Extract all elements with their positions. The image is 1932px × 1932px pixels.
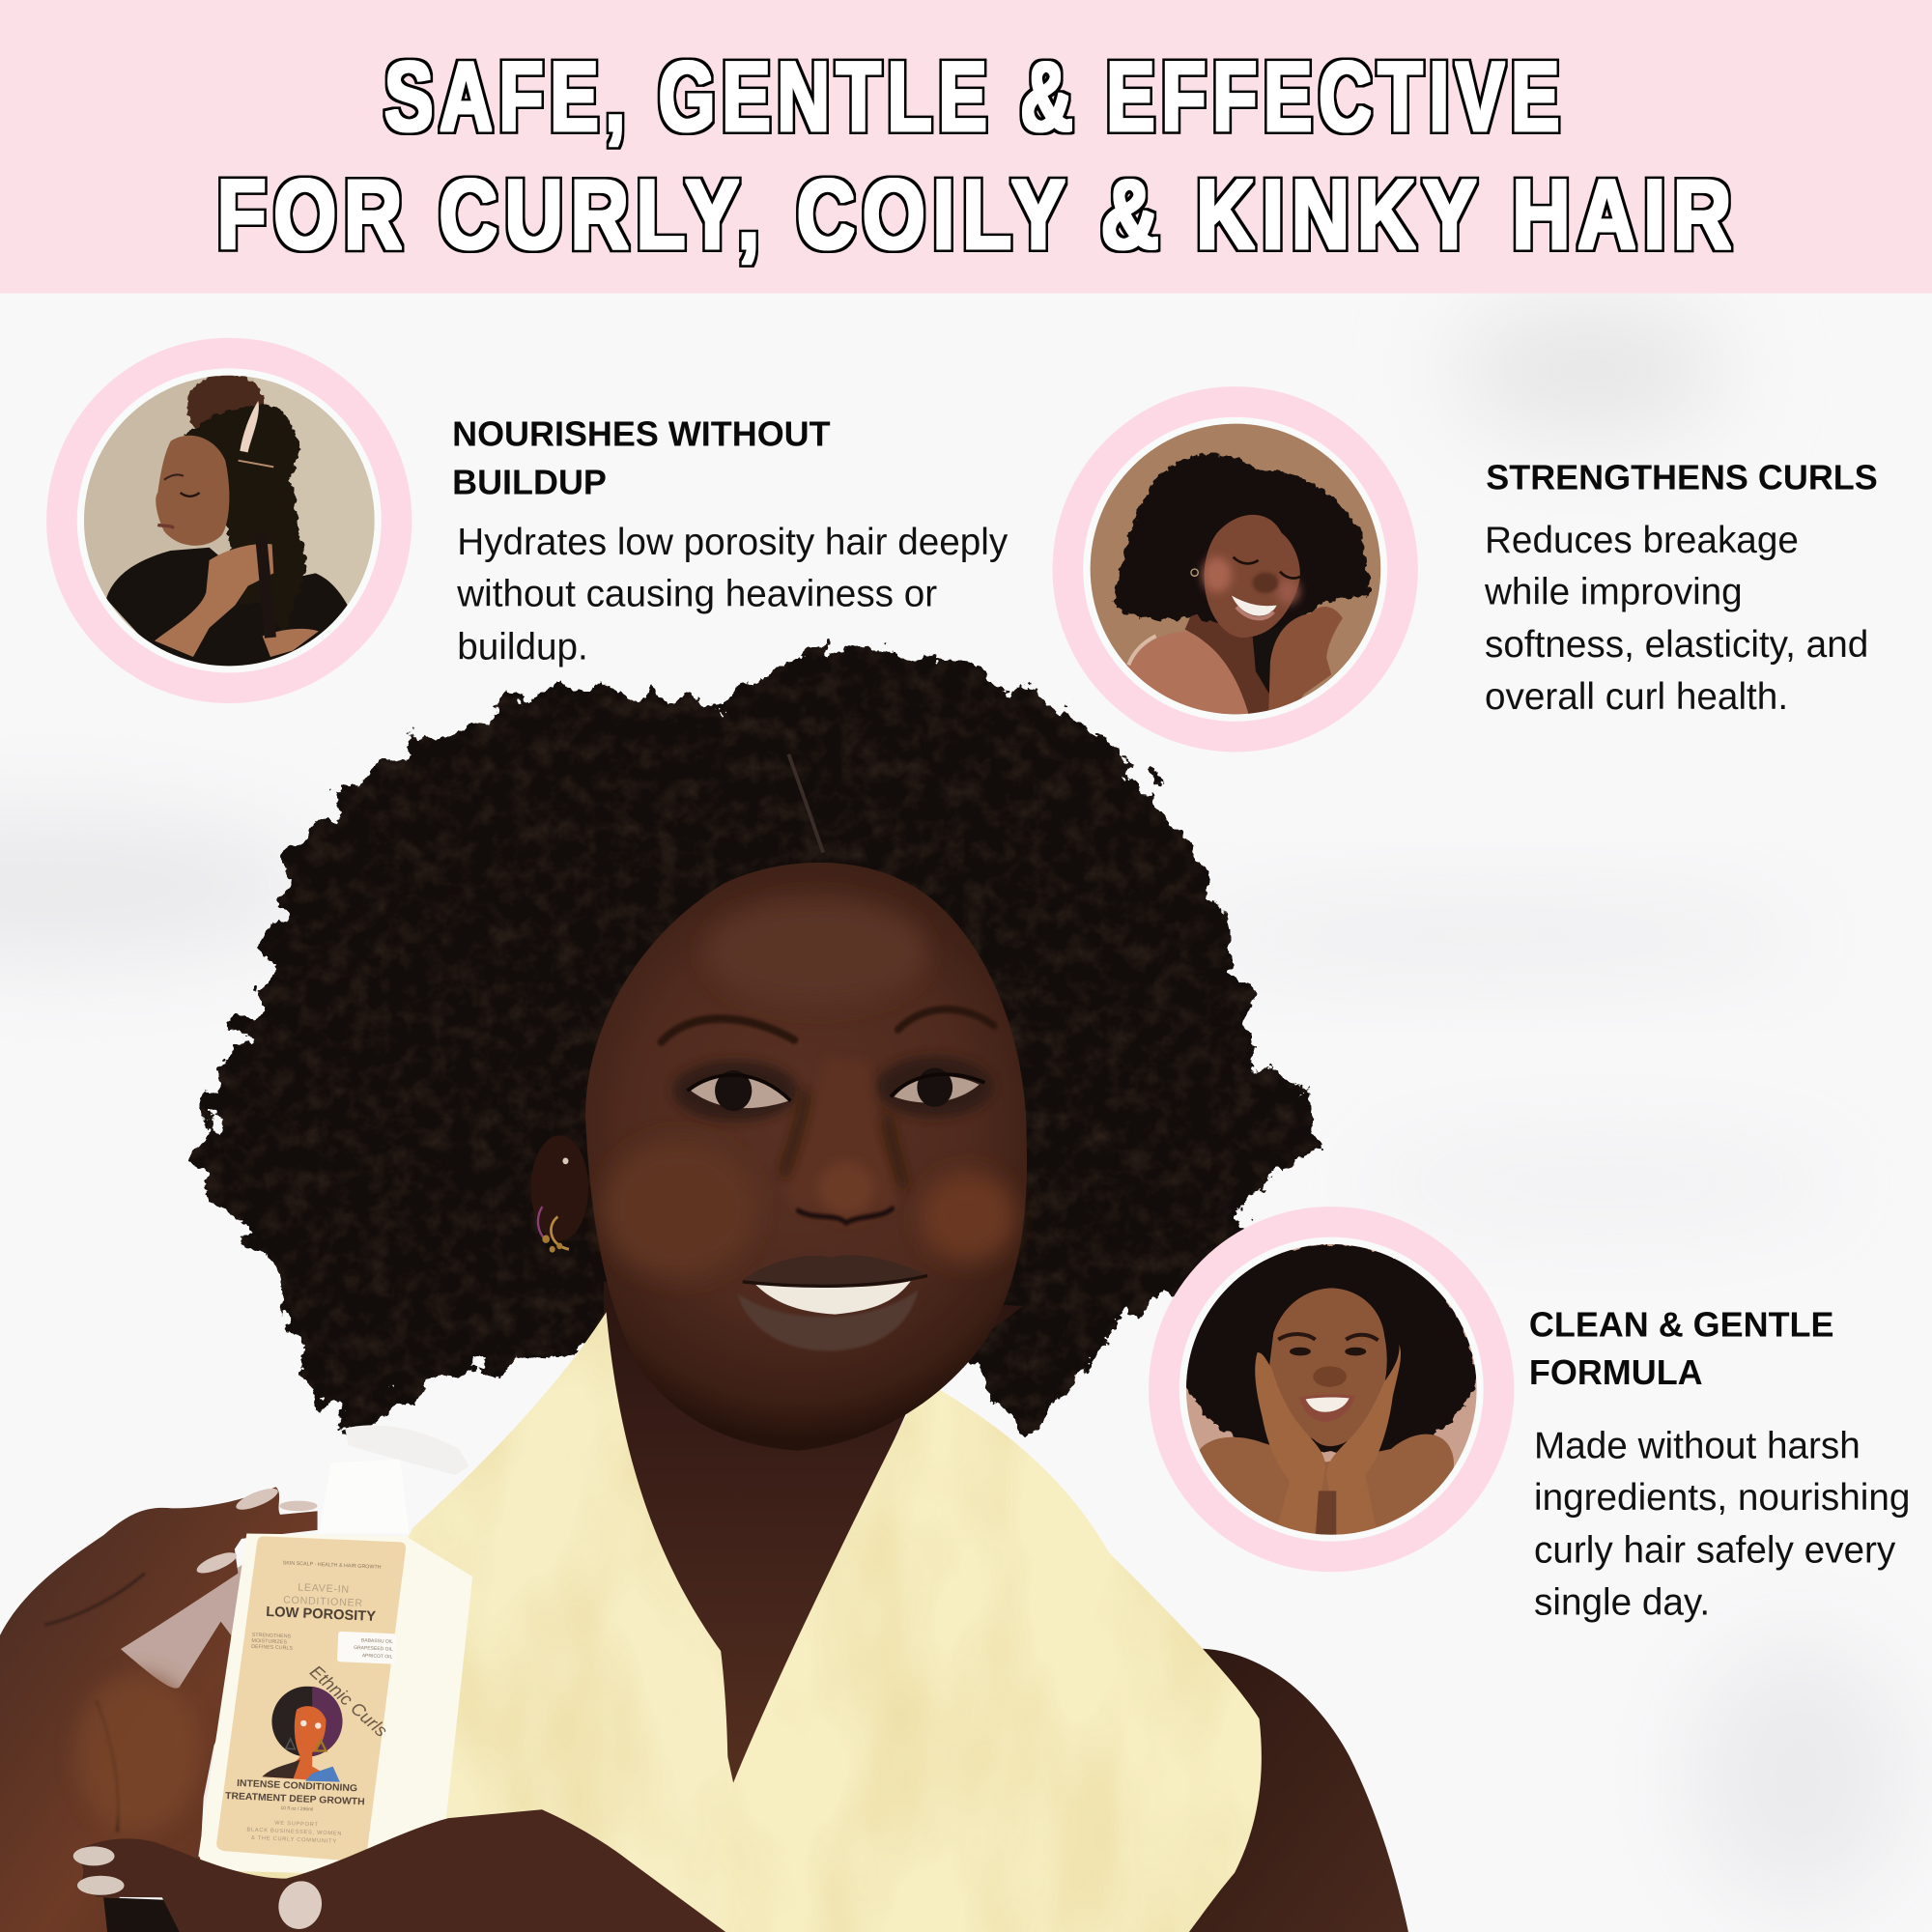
- hair: [1184, 1244, 1475, 1452]
- hair: [1113, 454, 1369, 636]
- raised hand: [155, 544, 273, 657]
- scarf: [185, 1312, 1262, 1932]
- photo circle: nourishes: [46, 338, 412, 703]
- face: [1268, 1288, 1387, 1446]
- heading and text: strengthens curls: Reduces breakage: [1485, 520, 1799, 561]
- heading and text: strengthens curls: while improving: [1484, 572, 1743, 613]
- photo circle: strengthens: [1053, 386, 1418, 752]
- hair strand: [261, 534, 270, 638]
- label script logo: Ethnic Curls: [306, 1662, 391, 1741]
- bottle label: INTENSE CONDITIONING: [237, 1778, 357, 1794]
- left eye: [691, 1076, 789, 1108]
- bottle label: BLACK BUSINESSES, WOMEN: [246, 1827, 342, 1837]
- nose: [786, 1058, 899, 1221]
- photo circle: clean and gentle: [1149, 1207, 1514, 1572]
- heading and text: strengthens curls: softness, elasticity, and: [1485, 624, 1868, 666]
- earrings: [538, 1207, 549, 1241]
- hair back: [191, 647, 1314, 1435]
- bottle body: [198, 1534, 472, 1874]
- black tee: [106, 548, 350, 676]
- bottle label: BABASSU OIL: [361, 1637, 393, 1645]
- bottle label: SKIN SCALP · HEALTH & HAIR GROWTH: [283, 1560, 382, 1571]
- right eye: [895, 1076, 980, 1102]
- heading and text: clean and gentle formula: FORMULA: [1529, 1352, 1703, 1392]
- bottle label: 10 fl oz / 296ml: [280, 1805, 313, 1813]
- eye shadows: [672, 1061, 798, 1122]
- title: SAFE, GENTLE & EFFECTIVE: [384, 42, 1566, 152]
- heading and text: nourishes without buildup: [452, 414, 1009, 668]
- nose: [1313, 1366, 1347, 1387]
- bottle label: DEFINES CURLS: [251, 1644, 293, 1652]
- shoulders: [1198, 1435, 1454, 1539]
- heading and text: nourishes without buildup: BUILDUP: [452, 462, 607, 501]
- neck: [1185, 607, 1275, 717]
- bottle label: CONDITIONER: [283, 1594, 363, 1609]
- right shoulder: [1182, 1649, 1408, 1932]
- eyebrows: [662, 1019, 794, 1042]
- heading and text: strengthens curls: STRENGTHENS CURLS: [1486, 457, 1878, 497]
- eyes: [1290, 1348, 1311, 1355]
- bottle label: & THE CURLY COMMUNITY: [251, 1835, 337, 1845]
- title: [216, 42, 1739, 270]
- dark gap under hands: [103, 1897, 204, 1932]
- hair front: parting: [788, 754, 823, 853]
- bottle label: [216, 1536, 406, 1861]
- hair clip: [240, 401, 259, 452]
- parting: [239, 461, 273, 467]
- heading and text: clean and gentle formula: single day.: [1534, 1582, 1710, 1624]
- bottle and hands: [0, 1425, 728, 1932]
- heading and text: clean and gentle formula: CLEAN & GENTLE: [1529, 1304, 1834, 1344]
- bottle label: LOW POROSITY: [266, 1605, 377, 1625]
- shoulder: [1123, 631, 1272, 720]
- upper lip: [743, 1255, 927, 1285]
- bottle label: GRAPESEED OIL: [354, 1645, 393, 1653]
- ear: [530, 1135, 588, 1241]
- neck: [604, 1282, 1023, 1799]
- face: [1205, 515, 1300, 638]
- main portrait: woman with natural hair: [0, 647, 1408, 1932]
- face: [530, 863, 1027, 1451]
- hand: [1268, 607, 1343, 713]
- earring: [1191, 569, 1198, 576]
- lower nails: [73, 1846, 115, 1865]
- bottle label: LEAVE-IN: [298, 1581, 350, 1596]
- bun: [186, 375, 265, 429]
- bottle label: TREATMENT DEEP GROWTH: [225, 1791, 365, 1807]
- heading and text: clean and gentle formula: curly hair safely every: [1534, 1529, 1896, 1571]
- left hand: [0, 1487, 318, 1932]
- heading and text: nourishes without buildup: NOURISHES WITHOUT: [452, 414, 831, 454]
- hands: [1255, 1352, 1325, 1539]
- mouth: [1299, 1394, 1355, 1422]
- smile: [1232, 596, 1277, 616]
- heading and text: nourishes without buildup: Hydrates low porosity hair deeply: [457, 522, 1009, 563]
- dark hair behind hand: [1253, 607, 1301, 703]
- heading and text: nourishes without buildup: without causing heaviness or: [456, 574, 937, 615]
- heading and text: clean and gentle formula: Made without harsh: [1534, 1426, 1861, 1467]
- gap behind fingers: [114, 1563, 245, 1697]
- teeth: [753, 1281, 911, 1315]
- bottle label: MOISTURIZES: [251, 1638, 288, 1645]
- heading and text: clean and gentle formula: [1529, 1304, 1910, 1624]
- lower lip: [737, 1290, 919, 1350]
- brows: [1278, 1334, 1316, 1340]
- face shape: [585, 863, 1027, 1451]
- hair top: [184, 404, 307, 586]
- scarf base under neck tip: [690, 1713, 788, 1932]
- lower hand: [263, 629, 319, 657]
- bottle label: STRENGTHENS: [252, 1633, 292, 1640]
- finger nails on top hand: [234, 1484, 280, 1514]
- cartoon woman: [262, 1687, 343, 1782]
- bottle label: WE SUPPORT: [274, 1821, 319, 1828]
- header banner: [0, 0, 1932, 294]
- face: [156, 436, 229, 546]
- cheek and forehead light: [602, 1140, 757, 1278]
- pump: [319, 1425, 469, 1534]
- heading and text: strengthens curls: overall curl health.: [1485, 676, 1788, 718]
- lower hand: [74, 1809, 728, 1932]
- heading and text: strengthens curls: [1484, 457, 1878, 718]
- heading and text: clean and gentle formula: ingredients, nourishing: [1534, 1477, 1910, 1519]
- bottle label: APRICOT OIL: [362, 1653, 393, 1661]
- heading and text: nourishes without buildup: buildup.: [457, 626, 588, 668]
